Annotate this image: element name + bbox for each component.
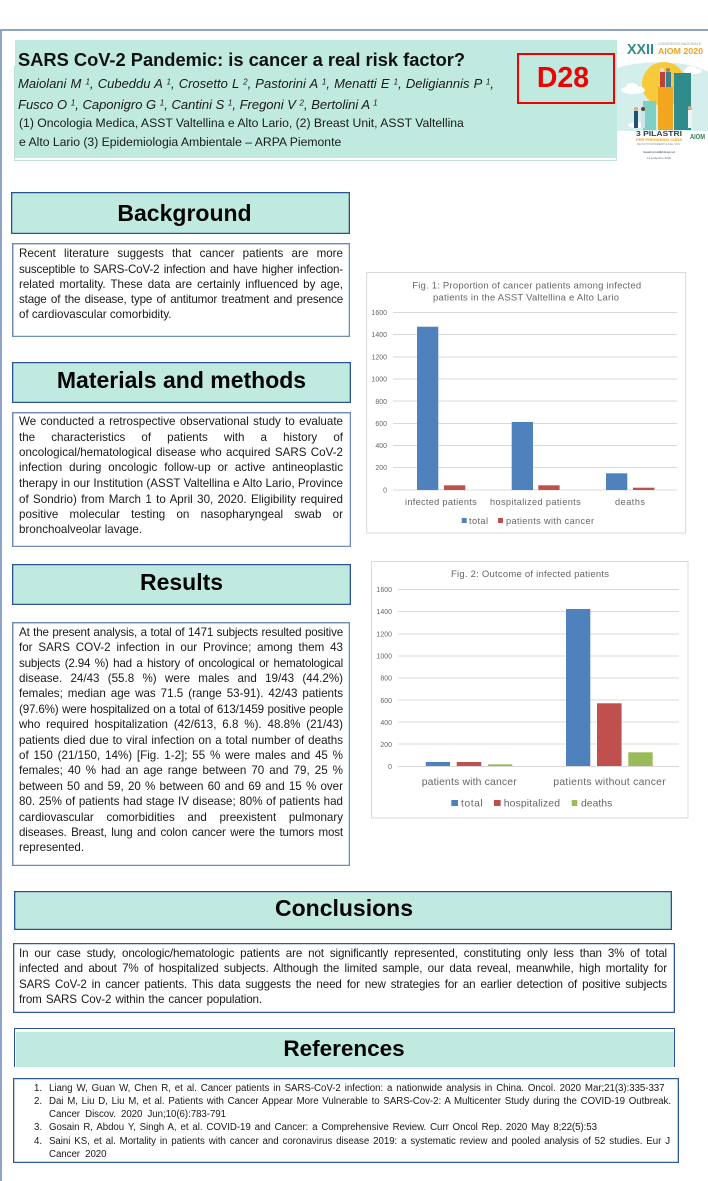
people figures: [634, 68, 692, 128]
poster code box: D28: [537, 62, 589, 94]
text block: Results: for SARS COV-2 infection in our Province; among them 43: [19, 641, 343, 654]
heading: Background: [11, 192, 350, 234]
text block: Background: [12, 243, 350, 337]
heading: Conclusions: Conclusions: [275, 895, 413, 921]
text block: Results: diseases. Breast, lung and colon cancer were the tumors most: [19, 826, 343, 839]
y axis labels: 400: [375, 443, 387, 450]
text block: Results: subjects (2.94 %) had a history of oncological or hematological: [19, 657, 343, 670]
congress logo: 14 settembre 2020: [647, 156, 671, 160]
pillar bars: [643, 101, 656, 130]
text block: Results: who required hospitalization (42/613, 6.8 %). 48.8% (21/43): [19, 718, 343, 731]
legend: [462, 516, 594, 526]
authors line 1: Maiolani M 1, Cubeddu A 1, Crosetto L 2, Pastorini A 1, Menatti E 1, Deligiannis P 1,: [18, 76, 494, 91]
legend: total: [469, 516, 488, 526]
poster code box: [517, 53, 615, 104]
text block: Results: [12, 622, 350, 866]
reference 1: 1.: [34, 1083, 42, 1094]
header panel: [14, 40, 617, 161]
category labels: patients with cancer: [422, 777, 517, 788]
text block: Results: between 50 and 59, 20 % between 60 and 69 and 15 % over: [19, 780, 343, 793]
authors line 2: Fusco O 1, Caponigro G 1, Cantini S 1, Fregoni V 2, Bertolini A 1: [18, 97, 378, 112]
category labels: infected patients: [405, 497, 477, 507]
legend: hospitalized: [504, 799, 560, 810]
affiliations line 2: e Alto Lario (3) Epidemiologia Ambientale – ARPA Piemonte: [19, 135, 341, 149]
red bars: hospitalized: [457, 703, 622, 766]
text block: Results: (97.6%) were hospitalized on a total of 613/1459 positive people: [19, 703, 343, 716]
clouds: [621, 66, 702, 128]
text block: Results: of 150 (21/150, 14%) [Fig. 1-2]; 55 % were males and 45 %: [19, 749, 343, 762]
chart: Fig. 1: [366, 272, 686, 534]
text block: Results: females; 40 % had an age range between 70 and 79, 25 %: [19, 764, 343, 777]
green bars: deaths: [488, 752, 653, 766]
reference list: Dai M, Liu D, Liu M, et al. Patients with Cancer Appear More Vulnerable to SARS-Cov-2: A Multicenter Study during the COVID-19 Outbreak.: [49, 1096, 671, 1107]
y axis labels: 600: [375, 421, 387, 428]
congress logo: AIOM 2020: [658, 46, 703, 56]
chart title: Fig. 2: Outcome of infected patients: [451, 569, 609, 580]
y axis labels: 200: [375, 465, 387, 472]
congress logo: [617, 42, 708, 160]
chart title: [412, 280, 641, 304]
society mark: AIOM: [690, 134, 705, 141]
text block: Materials and methods: [12, 412, 351, 547]
category labels: hospitalized patients: [490, 497, 581, 507]
y axis labels: 1400: [376, 609, 392, 616]
reference list: Cancer Discov. 2020 Jun;10(6):783-791: [49, 1109, 226, 1120]
text block: Materials and methods: bronchoalveolar lavage.: [19, 523, 142, 536]
y axis labels: 1200: [371, 354, 387, 362]
text block: Conclusions: infected and about 7% of hospitalized subjects. Although the limited sample, our data reveal, meanwhile, high mortality for: [19, 962, 667, 975]
y axis labels: 1600: [371, 310, 387, 317]
congress logo: PER PRENDERSI CURA: [636, 137, 682, 142]
y axis labels: 1200: [376, 632, 392, 638]
text block: Conclusions: In our case study, oncologic/hematologic patients are not significantly represented, constituting only less than 3% of total: [19, 947, 667, 960]
affiliations line 1: (1) Oncologia Medica, ASST Valtellina e Alto Lario, (2) Breast Unit, ASST Valtellina: [19, 116, 464, 130]
text block: Background: stage of the disease, type of antitumor treatment and presence: [19, 293, 343, 306]
pale background shape: [617, 62, 708, 150]
text block: Results: patients died due to viral infection on a total number of deaths: [19, 734, 343, 747]
text block: Materials and methods: oncological/hematological disease who acquired SARS CoV-2: [19, 446, 343, 459]
text block: Results: disease. 24/43 (55.8 %) were males and 19/43 (44.2%): [19, 672, 343, 685]
text block: Materials and methods: the characteristics of patients with a history of: [19, 431, 343, 444]
text block: Materials and methods: of Sondrio) from March 1 to April 30, 2020. Eligibility required: [19, 493, 343, 506]
legend: total: [461, 799, 483, 810]
poster title: SARS CoV-2 Pandemic: is cancer a real risk factor?: [18, 49, 465, 70]
red bars: patients with cancer: [444, 485, 654, 490]
chart: Fig. 2: [371, 561, 688, 818]
heading fill: [16, 1032, 674, 1067]
sun: [642, 62, 686, 106]
blue bars: total: [417, 327, 627, 490]
legend: patients with cancer: [506, 516, 594, 526]
reference list: Liang W, Guan W, Chen R, et al. Cancer patients in SARS-CoV-2 infection: a nationwide analysis in China. Oncol. 2020 Mar;21(3):335-337: [49, 1083, 664, 1094]
legend: [451, 799, 612, 810]
reference 3: 3.: [34, 1122, 42, 1133]
text block: Conclusions: [12, 943, 674, 1013]
y axis labels: 1600: [376, 587, 392, 594]
y axis labels: 400: [380, 720, 392, 727]
text block: Materials and methods: We conducted a retrospective observational study to evaluate: [19, 415, 343, 428]
legend: deaths: [581, 799, 612, 810]
text block: Conclusions: SARS CoV-2 in cancer patients. This data suggests the need for new strategies for an earlier detection of positive subjects: [19, 978, 667, 991]
chart title: patients in the ASST Valtellina e Alto Lario: [433, 292, 619, 304]
y axis labels: [376, 587, 392, 771]
header faint outline: [14, 66, 617, 161]
header background: [15, 40, 617, 158]
category labels: deaths: [615, 497, 645, 507]
y axis labels: 0: [388, 764, 392, 771]
text block: Results: 80. 25% of patients had stage IV disease; 80% of patients had: [19, 795, 343, 808]
y axis labels: 800: [375, 399, 387, 406]
y axis labels: [371, 310, 387, 494]
text block: Background: susceptible to SARS-CoV-2 infection and have higher infection-: [19, 263, 343, 276]
text block: Results: females; median age was 71.5 (range 53-91). 42/43 patients: [19, 687, 343, 700]
text block: Results: represented.: [19, 841, 84, 854]
poster frame top line: [0, 29, 708, 31]
y axis labels: 1400: [371, 332, 387, 339]
text block: Background: of cardiovascular comorbidity.: [19, 308, 172, 321]
reference 2: 2.: [34, 1096, 42, 1107]
text block: Conclusions: from SARS Cov-2 within the cancer population.: [19, 993, 262, 1006]
heading: Background: Background: [117, 200, 252, 226]
logo caption: 3 PILASTRI: [636, 129, 682, 138]
reference list: Gosain R, Abdou Y, Singh A, et al. COVID-19 and Cancer: a Comprehensive Review. Curr Oncol Rep. 2020 May 8;22(5):53: [49, 1122, 597, 1133]
heading: Results: [12, 564, 351, 605]
congress logo: CONGRESSO NAZIONALE: [658, 42, 702, 46]
text block: Background: related mortality. These data are certainly influenced by age,: [19, 278, 343, 291]
reference list: [12, 1078, 678, 1163]
y axis labels: 800: [380, 676, 392, 682]
y axis labels: 1000: [376, 654, 392, 660]
reference 4: 4.: [34, 1136, 42, 1147]
y axis labels: 600: [380, 698, 392, 705]
heading: Materials and methods: [12, 362, 351, 403]
category labels: [422, 777, 666, 788]
y axis labels: 1000: [371, 376, 387, 384]
poster frame left line: [0, 29, 2, 1181]
text block: Results: cardiovascular comorbidities and preexistent pulmonary: [19, 811, 343, 824]
heading: Conclusions: [14, 891, 672, 930]
congress name: XXII: [627, 42, 654, 58]
text block: Results: At the present analysis, a total of 1471 subjects resulted positive: [19, 626, 343, 639]
text block: Background: Recent literature suggests that cancer patients are more: [19, 247, 343, 260]
heading text: References: [283, 1036, 405, 1061]
heading: Results: Results: [140, 569, 223, 595]
text block: Materials and methods: therapy in our Institution (ASST Valtellina e Alto Lario, Province: [19, 477, 343, 490]
category labels: patients without cancer: [553, 777, 666, 788]
reference list: Saini KS, et al. Mortality in patients with cancer and coronavirus disease 2019: a systematic review and pooled analysis of 52 studies. Eur J: [49, 1136, 670, 1147]
heading: Materials and methods: Materials and methods: [57, 367, 306, 393]
congress logo: DEI NOSTRI PAZIENTI E DEL SSN: [637, 142, 680, 146]
category labels: [405, 497, 645, 507]
text block: Materials and methods: positive molecular testing on nasopharyngeal swab or: [19, 508, 343, 521]
blue bars: total: [426, 609, 590, 766]
congress logo: Research, Accessibility, Management: [643, 150, 675, 154]
text block: Materials and methods: infection during oncologic follow-up or active antineoplastic: [19, 461, 343, 474]
y axis labels: 200: [380, 742, 392, 749]
reference list: Cancer 2020: [49, 1149, 106, 1160]
y axis labels: 0: [383, 488, 387, 494]
chart title: Fig. 1: Proportion of cancer patients among infected: [412, 280, 641, 292]
heading: References: [14, 1028, 674, 1067]
